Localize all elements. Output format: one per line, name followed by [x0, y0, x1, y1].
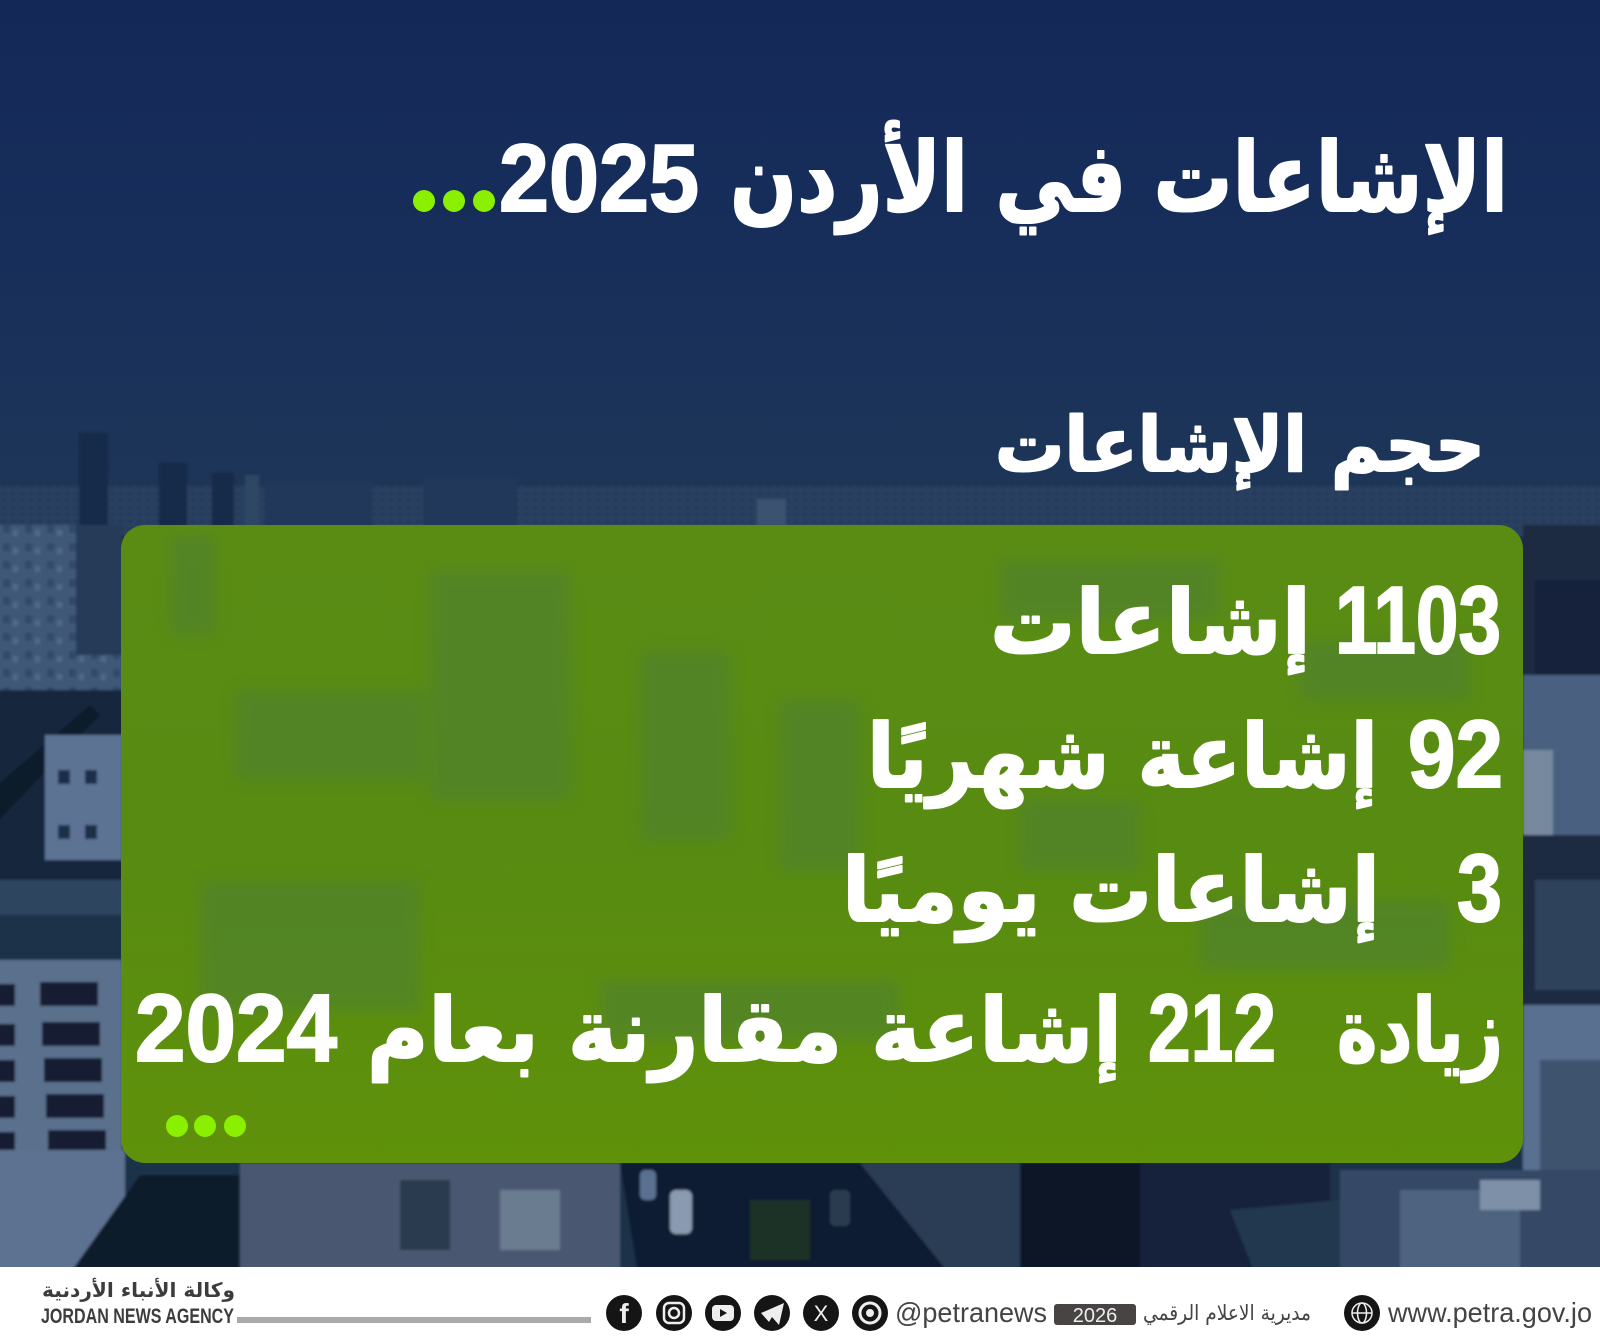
panel dots — [166, 1115, 246, 1137]
subheading: حجم الإشاعات — [995, 400, 1485, 490]
agency logotype — [41, 1277, 235, 1328]
icon: youtube — [705, 1295, 741, 1331]
year badge — [1054, 1304, 1136, 1327]
background: city photograph — [0, 433, 1600, 1287]
icon: globe — [1344, 1295, 1380, 1331]
icon: facebook — [606, 1295, 642, 1331]
left city strip — [0, 525, 122, 705]
footer bar — [0, 1267, 1600, 1342]
row 4: إشاعة مقارنة بعام — [367, 979, 1122, 1083]
website: www.petra.gov.jo — [1387, 1297, 1592, 1328]
row 3: 3 — [1457, 835, 1502, 942]
icon: telegram — [754, 1295, 790, 1331]
social handle: @petranews — [895, 1297, 1047, 1328]
row 4 — [135, 975, 1503, 1083]
row 3: إشاعات يوميًا — [842, 839, 1380, 943]
directorate label: مديرية الاعلام الرقمي — [1143, 1301, 1311, 1325]
title: 2025 — [499, 125, 699, 232]
icon: x: X — [814, 1301, 829, 1326]
icon: whatsapp — [852, 1295, 888, 1331]
icon: x — [803, 1295, 839, 1331]
row 4: 2024 — [135, 975, 337, 1082]
icon: facebook: f — [619, 1298, 629, 1329]
background: sky — [0, 0, 1600, 500]
icon: instagram — [656, 1295, 692, 1331]
panel: green statistics box — [121, 525, 1523, 1163]
row 1 — [990, 567, 1501, 675]
year badge: 2026 — [1073, 1305, 1117, 1327]
skyline towers — [79, 433, 786, 535]
row 2: إشاعة شهريًا — [867, 705, 1378, 809]
bottom rooftops and road — [240, 1163, 620, 1287]
row 1: إشاعات — [990, 571, 1311, 675]
row 4: زيادة — [1337, 979, 1503, 1082]
right city strip — [1523, 525, 1600, 680]
title — [413, 120, 1508, 235]
agency logotype: JORDAN NEWS AGENCY — [41, 1305, 234, 1328]
row 1: 1103 — [1335, 567, 1501, 674]
agency logotype: وكالة الأنباء الأردنية — [42, 1277, 235, 1302]
muted building texture in the panel — [170, 535, 1470, 1040]
footer rule — [237, 1317, 591, 1323]
row 4: 212 — [1148, 975, 1276, 1082]
row 2: 92 — [1408, 701, 1503, 808]
